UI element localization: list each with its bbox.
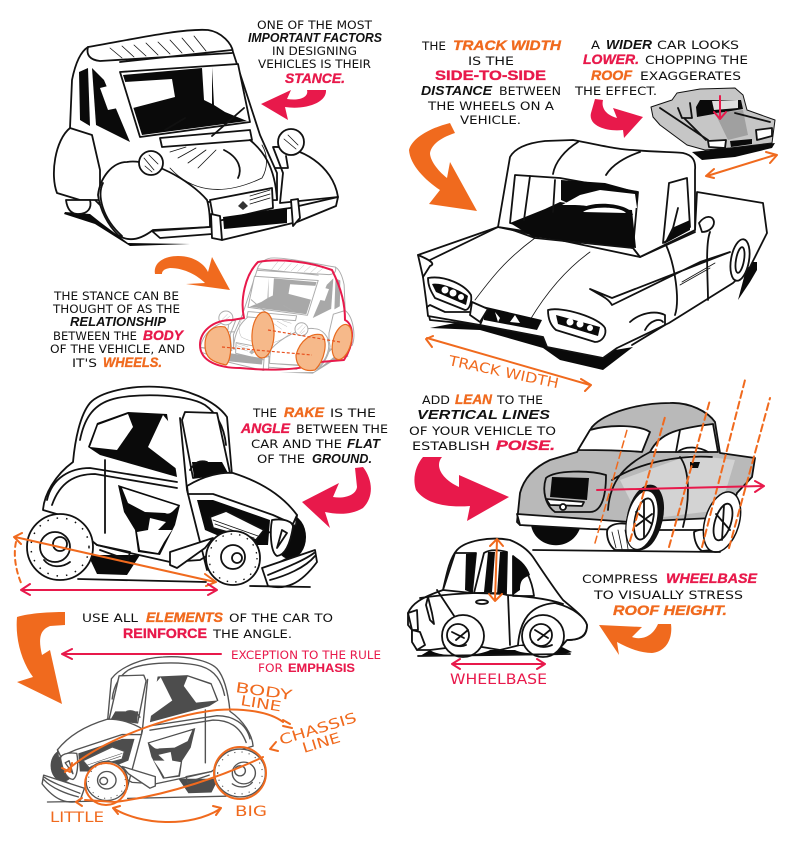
label: wheelbase: WHEELBASE bbox=[450, 672, 547, 688]
text: compress wheelbase: ROOF HEIGHT. bbox=[613, 602, 727, 618]
arrow: red pointing at small car bbox=[591, 99, 643, 138]
text: use all elements bbox=[82, 609, 333, 641]
text: track width definition: DISTANCE bbox=[421, 84, 493, 98]
text: exception to the rule: EXCEPTION TO THE RULE bbox=[231, 648, 381, 662]
labels: body, chassis, little, big: BIG bbox=[235, 804, 267, 820]
text: the rake is the angle: ANGLE bbox=[240, 420, 291, 436]
text: exception to the rule bbox=[231, 648, 381, 675]
labels: body, chassis, little, big: LITTLE bbox=[50, 810, 104, 826]
text: stance relationship bbox=[50, 289, 185, 370]
text: compress wheelbase: COMPRESS bbox=[582, 572, 658, 586]
text: wider car looks lower bbox=[574, 38, 748, 98]
text: wider car looks lower: A bbox=[591, 38, 600, 52]
text: stance relationship: BETWEEN THE bbox=[53, 329, 137, 343]
text: stance relationship: THOUGHT OF AS THE bbox=[52, 302, 180, 316]
text: add lean: TO THE bbox=[496, 393, 543, 407]
text: one of the most important factors: VEHICLES IS THEIR bbox=[258, 57, 371, 71]
text: one of the most important factors bbox=[248, 18, 383, 86]
text: one of the most important factors: STANCE. bbox=[285, 70, 345, 86]
text: use all elements: THE ANGLE. bbox=[212, 627, 292, 641]
text: the rake is the angle: THE bbox=[252, 406, 277, 420]
arrow: big orange curved to car bbox=[409, 123, 477, 211]
labels: body, chassis, little, big: LINE bbox=[300, 730, 342, 757]
arrow: track width dimension bbox=[426, 336, 591, 391]
text: the rake is the angle: OF THE bbox=[257, 452, 305, 466]
text: stance relationship: IT'S bbox=[72, 356, 97, 370]
car: coupe number 7 showing rake bbox=[27, 387, 317, 587]
car: front three-quarter stance drawing bbox=[54, 30, 338, 246]
text: compress wheelbase: TO VISUALLY STRESS bbox=[593, 588, 743, 602]
text: wider car looks lower: ROOF bbox=[591, 67, 632, 83]
text: the rake is the angle: CAR AND THE bbox=[251, 437, 342, 451]
text: wider car looks lower: EXAGGERATES bbox=[640, 69, 741, 83]
car: compact round car wheelbase bbox=[408, 539, 587, 657]
arrow: orange curving to small sketch bbox=[155, 256, 230, 290]
text: track width definition: TRACK WIDTH bbox=[453, 37, 562, 53]
text: track width definition: VEHICLE. bbox=[460, 113, 521, 127]
text: the rake is the angle: BETWEEN THE bbox=[296, 422, 388, 436]
text: one of the most important factors: ONE OF THE MOST bbox=[257, 18, 373, 32]
text: exception to the rule: EMPHASIS bbox=[288, 663, 355, 675]
text: stance relationship: RELATIONSHIP bbox=[70, 315, 167, 329]
arrow: wheelbase dimension bbox=[452, 659, 545, 669]
text: track width definition: SIDE-TO-SIDE bbox=[435, 67, 546, 83]
text: stance relationship: BODY bbox=[143, 327, 185, 343]
text: add lean: OF YOUR VEHICLE TO bbox=[409, 424, 556, 438]
text: wider car looks lower: THE EFFECT. bbox=[574, 84, 657, 98]
car: gray rear view with lean lines bbox=[517, 380, 770, 557]
text: the rake is the angle: IS THE bbox=[330, 406, 376, 420]
labels: body, chassis, little, big: CHASSIS bbox=[277, 710, 359, 749]
text: wider car looks lower: LOWER. bbox=[583, 51, 639, 67]
text: compress wheelbase: WHEELBASE bbox=[666, 570, 758, 586]
labels: body, chassis, little, big: BODY bbox=[234, 680, 294, 704]
text: wider car looks lower: CAR LOOKS bbox=[657, 38, 739, 52]
text: use all elements: REINFORCE bbox=[123, 625, 207, 641]
text: stance relationship: THE STANCE CAN BE bbox=[53, 289, 179, 303]
text: the rake is the angle: GROUND. bbox=[312, 452, 372, 466]
text: one of the most important factors: IN DESIGNING bbox=[272, 44, 357, 58]
labels: body, chassis, little, big: LINE bbox=[239, 693, 282, 715]
text: add lean: LEAN bbox=[455, 391, 493, 407]
arrow: orange double track on small car bbox=[706, 152, 777, 178]
text: track width definition: BETWEEN bbox=[499, 84, 561, 98]
text: track width definition: THE bbox=[421, 39, 446, 53]
text: use all elements: ELEMENTS bbox=[146, 609, 224, 625]
text: add lean: ESTABLISH bbox=[412, 439, 490, 453]
text: track width definition: IS THE bbox=[468, 54, 514, 68]
number panel bbox=[118, 485, 180, 555]
text: the rake is the angle: RAKE bbox=[284, 404, 325, 420]
car: wide low car, rear view bbox=[418, 140, 767, 370]
text: one of the most important factors: IMPORTANT FACTORS bbox=[248, 31, 383, 45]
label: track width: TRACK WIDTH bbox=[446, 353, 560, 392]
text: stance relationship: OF THE VEHICLE, AND bbox=[50, 342, 185, 356]
text: the rake is the angle bbox=[240, 404, 388, 466]
labels: body, chassis, little, big bbox=[50, 680, 359, 826]
rake lines and arrows bbox=[14, 533, 217, 595]
arrow: big orange curved down bbox=[17, 612, 65, 704]
arrow: red curved to gray car bbox=[414, 457, 509, 521]
arrow: orange curved to small car bbox=[599, 624, 671, 655]
text: track width definition: THE WHEELS ON A bbox=[427, 99, 554, 113]
diagram: coupe mirrored with orange lines bbox=[42, 657, 292, 822]
text: add lean: VERTICAL LINES bbox=[417, 408, 551, 422]
text: use all elements: OF THE CAR TO bbox=[229, 611, 333, 625]
text: add lean bbox=[409, 391, 556, 453]
text: wider car looks lower: CHOPPING THE bbox=[645, 53, 748, 67]
arrow: red pointing at car bbox=[261, 90, 326, 120]
diagram: body and wheels sketch bbox=[200, 258, 355, 374]
text: use all elements: USE ALL bbox=[82, 611, 139, 625]
text: wider car looks lower: WIDER bbox=[606, 38, 652, 52]
text: stance relationship: WHEELS. bbox=[103, 354, 162, 370]
text: add lean: POISE. bbox=[496, 437, 555, 453]
car: small chopped low car bbox=[651, 88, 775, 160]
exception arrow line bbox=[62, 649, 221, 659]
text: add lean: ADD bbox=[422, 393, 450, 407]
text: exception to the rule: FOR bbox=[258, 661, 283, 675]
text: track width definition bbox=[421, 37, 562, 127]
text: the rake is the angle: FLAT bbox=[347, 437, 381, 451]
arrow: red curving to car bbox=[302, 467, 371, 528]
text: compress wheelbase bbox=[582, 570, 758, 618]
